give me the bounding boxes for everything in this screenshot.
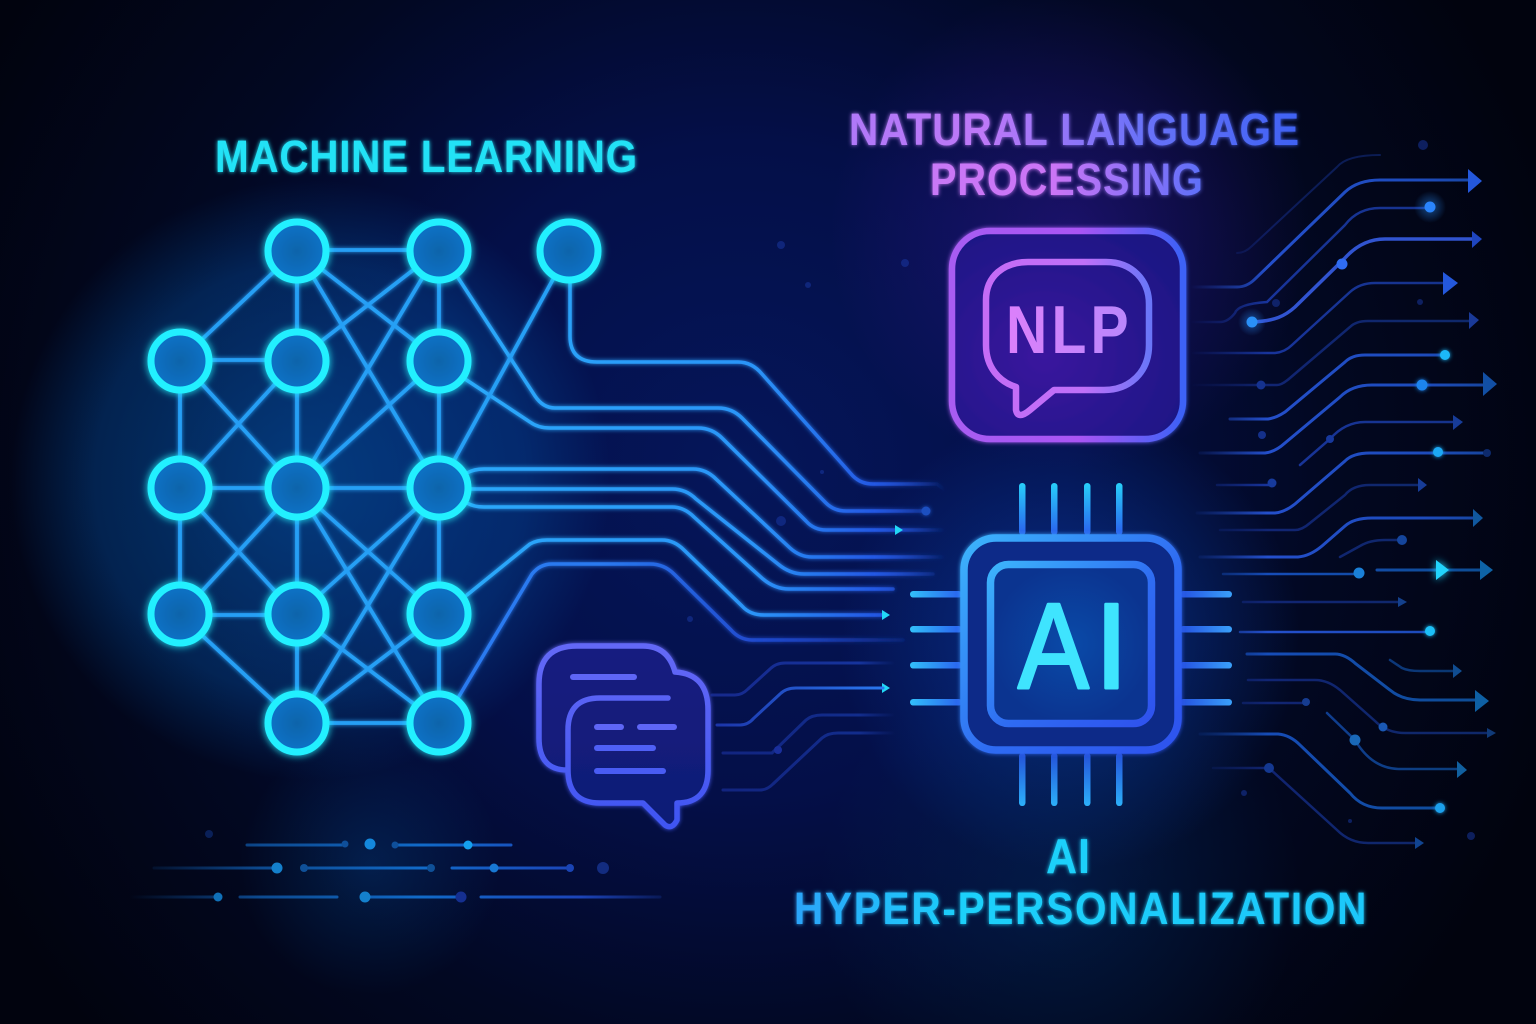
icon: ai chip	[910, 483, 1232, 806]
data dashes: bottom left	[127, 830, 660, 902]
back bubble	[539, 646, 708, 827]
title: machine learning: MACHINE LEARNING	[215, 132, 637, 183]
nlp rounded square	[952, 231, 1183, 439]
stream nodes	[1238, 191, 1491, 813]
icon: nlp speech bubble	[952, 231, 1183, 439]
title: natural language processing: NATURAL LANGUAGE	[849, 105, 1299, 156]
title: ai hyper-personalization	[794, 828, 1366, 935]
title: natural language processing	[849, 105, 1299, 205]
stream arrowheads	[1398, 169, 1497, 849]
title: ai hyper-personalization: HYPER-PERSONALIZATION	[794, 884, 1366, 935]
title: ai hyper-personalization: AI	[1046, 828, 1090, 884]
neural network: nodes	[151, 222, 598, 752]
chip inner square	[990, 564, 1152, 724]
title: natural language processing: PROCESSING	[930, 155, 1203, 205]
icon: chat bubbles	[539, 646, 708, 827]
data streams: right	[1187, 155, 1487, 843]
chip pins	[910, 483, 1232, 806]
chip label	[1018, 578, 1128, 715]
wires: network to chip	[455, 273, 962, 698]
chat text lines	[573, 677, 674, 771]
neural network: edges	[180, 250, 569, 723]
wires: chat to chip	[712, 663, 927, 790]
chip body	[964, 538, 1178, 750]
chip label: I	[1095, 578, 1128, 714]
background particles	[687, 140, 1475, 840]
chip label: A	[1018, 578, 1089, 715]
wire arrowheads	[882, 525, 903, 693]
nlp label: NLP	[1006, 292, 1129, 368]
nlp bubble outline	[986, 262, 1149, 415]
